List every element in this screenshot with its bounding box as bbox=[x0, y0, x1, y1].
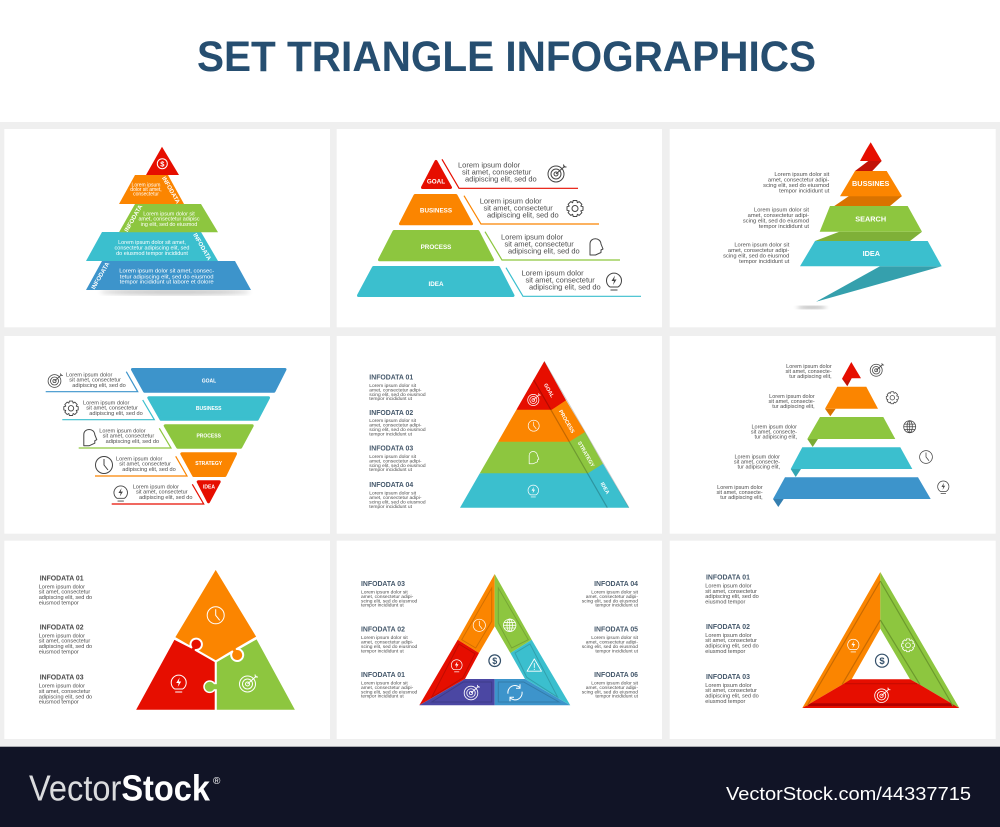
outer edge bbox=[544, 361, 629, 508]
teal line bbox=[62, 400, 154, 420]
green line bbox=[79, 428, 171, 448]
red bottom band bbox=[807, 703, 955, 706]
infodata 03: INFODATA 03 bbox=[361, 581, 405, 588]
idea text: adipiscing elit, sed do bbox=[529, 282, 601, 292]
icon: gear bbox=[886, 392, 898, 404]
text block 1: scing elit, sed do eiusmod bbox=[763, 183, 829, 189]
text 1: tur adipiscing elit, bbox=[789, 374, 832, 380]
text block 3: amet, consectetur adipi- bbox=[728, 248, 789, 254]
green knob bbox=[204, 681, 215, 692]
inset outlines bbox=[432, 588, 559, 702]
teal layer bbox=[791, 447, 912, 469]
panel 4: inverted pyramid bbox=[4, 336, 330, 534]
icon: bulb bbox=[171, 675, 186, 692]
infodata 05: scing elit, sed do eiusmod bbox=[582, 644, 638, 650]
orange line bbox=[464, 196, 599, 224]
text 3: Lorem ipsum dolor bbox=[751, 424, 797, 430]
text block 2: tempor incididunt ut bbox=[759, 224, 809, 230]
infodata 04: INFODATA 04 bbox=[369, 482, 413, 489]
strategy layer bbox=[182, 454, 236, 476]
icon: bulb bbox=[451, 660, 462, 672]
icon: head bbox=[590, 239, 603, 255]
infodata 01: INFODATA 01 bbox=[369, 374, 413, 382]
icon: target bbox=[528, 393, 541, 406]
infodata 03: sit amet, consectetur bbox=[39, 689, 90, 695]
icon: target bbox=[240, 674, 258, 692]
text 2: sit amet, consectetur bbox=[86, 406, 138, 412]
green fold bbox=[815, 232, 922, 241]
business layer bbox=[400, 196, 472, 224]
infodata 02: adipiscing elit, sed do bbox=[39, 644, 92, 650]
footer logo: VectorStock bbox=[29, 768, 211, 809]
layer labels bbox=[852, 179, 889, 258]
infodata 01: amet, consectetur adipi- bbox=[361, 685, 414, 691]
text 4: tur adipiscing elit, bbox=[738, 465, 780, 471]
infodata 02: eiusmod tempor bbox=[705, 649, 746, 655]
red segment bbox=[419, 640, 479, 705]
infodata 04: amet, consectetur adipi- bbox=[369, 495, 422, 501]
infodata 01: Lorem ipsum dolor bbox=[705, 584, 752, 590]
teal text: do eiusmod tempor incididunt bbox=[116, 251, 188, 257]
orange fold bbox=[825, 409, 836, 416]
blue text: tempor incididunt ut labore et dolore bbox=[120, 280, 214, 286]
infodata 01: amet, consectetur adipi- bbox=[369, 387, 422, 393]
teal tail bbox=[816, 266, 942, 302]
red band bbox=[516, 361, 566, 410]
fold labels: PROCESS bbox=[557, 409, 575, 435]
infodata 04: scing elit, sed do eiusmod bbox=[582, 598, 638, 604]
infodata 02: sit amet, consectetur bbox=[39, 639, 90, 645]
red side bbox=[802, 679, 959, 708]
orange segment bbox=[458, 574, 495, 653]
shadow under pyramid bbox=[100, 289, 250, 295]
layer labels bbox=[420, 178, 452, 288]
panel 6: stepped ribbon pyramid bbox=[670, 336, 996, 534]
infodata 02: amet, consectetur adipi- bbox=[361, 640, 414, 646]
layer labels: BUSINESS bbox=[196, 406, 222, 412]
infodata 01: Lorem ipsum dolor sit bbox=[369, 383, 417, 389]
infodata 02: tempor incididunt ut bbox=[361, 648, 404, 654]
text 3: sit amet, consectetur bbox=[103, 434, 154, 440]
icon: clock bbox=[207, 607, 224, 624]
orange fold bbox=[834, 196, 902, 206]
infodata 02: Lorem ipsum dolor bbox=[705, 633, 752, 639]
icon: bulb bbox=[528, 485, 539, 497]
fold labels bbox=[542, 383, 610, 496]
teal layer bbox=[86, 232, 218, 261]
infodata 03: scing elit, sed do eiusmod bbox=[361, 598, 418, 604]
orange tab label: INFODATA bbox=[160, 176, 181, 206]
green puzzle piece bbox=[216, 638, 296, 711]
text 1: Lorem ipsum dolor bbox=[786, 364, 832, 370]
panel 3: zigzag pyramid bbox=[670, 129, 996, 327]
footer bar bbox=[0, 747, 1000, 827]
infodata 02: INFODATA 02 bbox=[40, 624, 84, 632]
panel 2: rounded pyramid with lines bbox=[337, 129, 662, 327]
infodata 03: amet, consectetur adipi- bbox=[361, 594, 414, 600]
infodata 06: INFODATA 06 bbox=[594, 672, 638, 679]
icon: globe bbox=[503, 619, 516, 632]
icon: target bbox=[875, 688, 890, 702]
green fold bbox=[807, 439, 818, 447]
orange text: consectetur bbox=[133, 192, 159, 198]
page background bbox=[0, 122, 1000, 747]
green text: ing elit, sed do eiusmod bbox=[141, 222, 197, 228]
text 4: adipiscing elit, sed do bbox=[122, 467, 176, 473]
orange text: Lorem ipsum bbox=[132, 182, 160, 188]
text 2: Lorem ipsum dolor bbox=[769, 394, 815, 400]
icon: dollar bbox=[157, 159, 167, 169]
orange line bbox=[95, 456, 187, 476]
green text: amet, consectetur adipisc bbox=[138, 217, 200, 223]
process text: adipiscing elit, sed do bbox=[508, 246, 580, 256]
blue text: Lorem ipsum dolor sit amet, consec- bbox=[119, 269, 214, 275]
red puzzle piece with knob bbox=[134, 638, 216, 711]
process text: Lorem ipsum dolor bbox=[501, 232, 564, 242]
orange layer bbox=[840, 171, 902, 196]
infodata 03: adipiscing elit, sed do bbox=[39, 694, 92, 700]
green layer bbox=[820, 206, 922, 232]
panel 1: layered pyramid bbox=[4, 129, 330, 327]
infodata 03: eiusmod tempor bbox=[705, 699, 746, 705]
orange layer bbox=[119, 175, 184, 204]
fold line bbox=[534, 380, 607, 508]
infodata 04: amet, consectetur adipi- bbox=[586, 594, 638, 600]
infodata 01: tempor incididunt ut bbox=[361, 694, 404, 700]
infodata 03: Lorem ipsum dolor sit bbox=[361, 590, 408, 596]
layer labels: GOAL bbox=[427, 178, 445, 186]
goal text: sit amet, consectetur bbox=[462, 168, 532, 176]
infodata 01: adipiscing elit, sed do bbox=[39, 595, 92, 601]
infodata 01: scing elit, sed do eiusmod bbox=[361, 689, 418, 695]
text 4: sit amet, consecte- bbox=[734, 460, 780, 466]
green segment bbox=[495, 574, 532, 653]
infodata 05: amet, consectetur adipi- bbox=[586, 640, 638, 646]
infodata 03: Lorem ipsum dolor bbox=[39, 684, 85, 690]
infodata 01: scing elit, sed do eiusmod bbox=[369, 392, 426, 398]
infodata 02: adipiscing elit, sed do bbox=[705, 644, 759, 650]
infodata 06: Lorem ipsum dolor sit bbox=[591, 680, 639, 686]
infodata 05: Lorem ipsum dolor sit bbox=[591, 635, 639, 641]
infodata 05: tempor incididunt ut bbox=[595, 648, 639, 654]
text 3: Lorem ipsum dolor bbox=[99, 428, 146, 434]
red apex bbox=[146, 147, 179, 175]
red line bbox=[112, 484, 204, 504]
red arrow bbox=[842, 362, 861, 381]
text block 3: Lorem ipsum dolor sit bbox=[734, 243, 790, 249]
icon: target bbox=[548, 164, 566, 182]
infodata 01: eiusmod tempor bbox=[705, 600, 746, 606]
infodata 03: Lorem ipsum dolor sit bbox=[369, 454, 417, 460]
infodata 01: INFODATA 01 bbox=[40, 576, 84, 582]
blue layer bbox=[773, 477, 931, 499]
infodata 01: eiusmod tempor bbox=[39, 600, 79, 606]
layer labels: IDEA bbox=[203, 484, 215, 490]
orange layer bbox=[825, 387, 878, 409]
text 2: sit amet, consecte- bbox=[769, 399, 815, 405]
green side bbox=[880, 572, 959, 708]
process layer bbox=[165, 426, 252, 447]
goal text: Lorem ipsum dolor bbox=[458, 160, 521, 170]
orange band bbox=[498, 400, 585, 442]
blue layer bbox=[86, 261, 251, 290]
infodata 01: sit amet, consectetur bbox=[39, 590, 90, 596]
red arrow head bbox=[860, 142, 882, 161]
layer labels: IDEA bbox=[863, 249, 881, 258]
green line bbox=[485, 232, 620, 260]
icon: head bbox=[529, 452, 539, 464]
blue text: tetur adipiscing elit, sed do eiusmod bbox=[120, 274, 214, 280]
infodata 03: scing elit, sed do eiusmod bbox=[369, 463, 426, 469]
infodata 02: Lorem ipsum dolor sit bbox=[361, 635, 408, 641]
text block 2: scing elit, sed do eiusmod bbox=[743, 218, 809, 224]
green knob joint bbox=[212, 684, 218, 689]
layer labels: PROCESS bbox=[421, 244, 451, 251]
text block 1: tempor incididunt ut bbox=[779, 188, 830, 194]
text 4: Lorem ipsum dolor bbox=[734, 455, 780, 461]
teal layer bbox=[800, 241, 942, 266]
process text: sit amet, consectetur bbox=[504, 240, 574, 248]
text 5: tur adipiscing elit, bbox=[720, 495, 763, 501]
icon: target bbox=[48, 373, 63, 387]
idea text: sit amet, consectetur bbox=[526, 276, 595, 284]
business text: adipiscing elit, sed do bbox=[487, 210, 559, 220]
infodata 01: INFODATA 01 bbox=[361, 672, 405, 679]
blue segment bbox=[495, 679, 570, 705]
text 2: Lorem ipsum dolor bbox=[83, 400, 129, 406]
layer labels: STRATEGY bbox=[195, 461, 223, 467]
text 1: Lorem ipsum dolor bbox=[66, 372, 112, 378]
icon: dollar bbox=[876, 654, 888, 667]
infodata 03: amet, consectetur adipi- bbox=[369, 458, 422, 464]
teal line bbox=[506, 268, 641, 296]
infodata 03: tempor incididunt ut bbox=[369, 467, 413, 473]
text block 2: amet, consectetur adipi- bbox=[748, 213, 809, 219]
text 5: adipiscing elit, sed do bbox=[139, 495, 192, 501]
panel 7: puzzle triangle bbox=[4, 541, 330, 739]
teal tab label: INFODATA bbox=[191, 233, 212, 262]
infodata 03: sit amet, consectetur bbox=[705, 688, 757, 694]
ribbon ridges bbox=[807, 581, 953, 706]
business text: sit amet, consectetur bbox=[484, 204, 553, 212]
icon: dollar: $ bbox=[492, 656, 497, 666]
red ridge bbox=[845, 683, 917, 685]
green text: Lorem ipsum dolor sit bbox=[143, 211, 195, 217]
footer url: VectorStock.com/44337715 bbox=[726, 783, 971, 804]
idea layer bbox=[358, 268, 513, 296]
teal band bbox=[460, 464, 629, 508]
panel 5: folded triangle bbox=[337, 336, 662, 534]
text 5: Lorem ipsum dolor bbox=[133, 484, 179, 490]
green layer bbox=[119, 204, 218, 232]
icon: target bbox=[464, 685, 480, 700]
business text: Lorem ipsum dolor bbox=[480, 196, 542, 206]
icon: dollar: $ bbox=[160, 160, 165, 168]
infodata 03: INFODATA 03 bbox=[369, 446, 413, 452]
icon: head bbox=[84, 429, 97, 446]
icon: clock bbox=[528, 420, 539, 431]
fold labels: STRATEGY bbox=[576, 441, 595, 469]
infodata 01: sit amet, consectetur bbox=[705, 589, 757, 595]
infodata 04: scing elit, sed do eiusmod bbox=[369, 500, 426, 506]
infodata 03: eiusmod tempor bbox=[39, 700, 79, 706]
infodata 02: eiusmod tempor bbox=[39, 649, 79, 655]
icon: cycle bbox=[508, 684, 522, 701]
idea text: Lorem ipsum dolor bbox=[522, 268, 584, 278]
idea layer bbox=[198, 482, 219, 502]
infodata 02: scing elit, sed do eiusmod bbox=[361, 644, 418, 650]
orange side bbox=[802, 572, 880, 708]
infodata 02: amet, consectetur adipi- bbox=[369, 423, 422, 429]
fold labels: IDEA bbox=[599, 482, 610, 496]
infodata 02: INFODATA 02 bbox=[706, 624, 750, 631]
layer labels: SEARCH bbox=[855, 214, 886, 223]
icon: bulb bbox=[114, 486, 127, 501]
icon: warning bbox=[527, 659, 542, 671]
text 3: adipiscing elit, sed do bbox=[106, 439, 159, 445]
infodata 04: tempor incididunt ut bbox=[369, 504, 413, 510]
text 5: sit amet, consecte- bbox=[717, 490, 763, 496]
infodata 03: INFODATA 03 bbox=[40, 674, 84, 682]
orange text: dolor sit amet, bbox=[130, 187, 162, 193]
text 4: sit amet, consectetur bbox=[119, 462, 171, 468]
infodata 02: INFODATA 02 bbox=[361, 626, 405, 634]
text block 1: Lorem ipsum dolor sit bbox=[774, 172, 830, 178]
text 2: tur adipiscing elit, bbox=[772, 404, 815, 410]
goal text: adipiscing elit, sed do bbox=[465, 174, 537, 184]
infodata 03: tempor incididunt ut bbox=[361, 603, 404, 609]
panel 8: six segment triangle bbox=[337, 541, 662, 739]
infodata 02: scing elit, sed do eiusmod bbox=[369, 427, 426, 433]
text block 1: amet, consectetur adipi- bbox=[768, 177, 829, 183]
infodata 05: INFODATA 05 bbox=[594, 626, 638, 634]
infodata 01: adipiscing elit, sed do bbox=[705, 594, 759, 600]
infodata 06: scing elit, sed do eiusmod bbox=[582, 689, 638, 695]
layer labels: IDEA bbox=[428, 281, 444, 288]
infodata 02: sit amet, consectetur bbox=[705, 638, 757, 644]
icon: gear bbox=[567, 200, 583, 216]
icon: clock bbox=[920, 451, 932, 463]
shadow bbox=[797, 306, 827, 309]
infodata 03: INFODATA 03 bbox=[706, 674, 750, 681]
layer labels: BUSSINES bbox=[852, 179, 889, 188]
red line bbox=[442, 159, 578, 188]
teal segment bbox=[510, 640, 570, 705]
infodata 01: INFODATA 01 bbox=[706, 574, 750, 582]
text 1: sit amet, consecte- bbox=[786, 369, 832, 375]
icon: globe bbox=[904, 421, 916, 433]
text block 2: Lorem ipsum dolor sit bbox=[754, 208, 809, 214]
blue fold bbox=[773, 499, 784, 507]
registered mark: ® bbox=[213, 776, 221, 787]
goal layer bbox=[132, 370, 285, 391]
infodata 02: Lorem ipsum dolor sit bbox=[369, 418, 417, 424]
icon: gear bbox=[64, 401, 78, 416]
business layer bbox=[149, 398, 268, 419]
layer labels: PROCESS bbox=[196, 434, 222, 440]
text 1: sit amet, consectetur bbox=[69, 378, 121, 384]
layer labels: GOAL bbox=[202, 378, 216, 384]
text block 3: scing elit, sed do eiusmod bbox=[723, 254, 789, 260]
layer labels: BUSINESS bbox=[420, 208, 452, 215]
goal layer bbox=[422, 162, 450, 188]
infodata 02: Lorem ipsum dolor bbox=[39, 633, 85, 639]
teal text: Lorem ipsum dolor sit amet, bbox=[118, 240, 186, 246]
fold labels: GOAL bbox=[542, 383, 555, 400]
icon: bulb bbox=[938, 481, 949, 494]
indigo segment bbox=[419, 679, 495, 705]
red arrow fold bbox=[855, 161, 882, 171]
panel 9: ribbon triangle bbox=[670, 541, 996, 739]
infodata 01: Lorem ipsum dolor sit bbox=[361, 680, 408, 686]
text 2: adipiscing elit, sed do bbox=[89, 411, 143, 417]
green tab label: INFODATA bbox=[124, 204, 145, 233]
infodata 03: Lorem ipsum dolor bbox=[705, 683, 752, 689]
text 4: Lorem ipsum dolor bbox=[116, 456, 162, 462]
infodata 06: tempor incididunt ut bbox=[595, 694, 639, 700]
red fold bbox=[842, 378, 852, 386]
infodata 06: amet, consectetur adipi- bbox=[586, 685, 638, 691]
icon: gear bbox=[902, 639, 914, 652]
icon: clock bbox=[96, 456, 112, 474]
icon: bulb bbox=[606, 273, 622, 290]
process layer bbox=[380, 232, 492, 260]
layer labels bbox=[195, 378, 223, 490]
orange puzzle piece with knob bbox=[174, 568, 258, 662]
infodata 02: INFODATA 02 bbox=[369, 410, 413, 417]
text 1: adipiscing elit, sed do bbox=[72, 383, 126, 389]
infodata 04: tempor incididunt ut bbox=[595, 603, 639, 609]
blue tab label: INFODATA bbox=[91, 261, 112, 291]
green layer bbox=[807, 417, 895, 439]
title: SET TRIANGLE INFOGRAPHICS bbox=[197, 33, 816, 81]
teal fold bbox=[791, 469, 801, 477]
text 5: Lorem ipsum dolor bbox=[717, 485, 763, 491]
icon: clock bbox=[473, 619, 485, 631]
text 3: sit amet, consecte- bbox=[751, 429, 797, 435]
green band bbox=[480, 432, 603, 473]
teal text: consectetur adipiscing elit, sed bbox=[115, 246, 189, 252]
infodata 01: tempor incididunt ut bbox=[369, 396, 413, 402]
icon: bulb bbox=[848, 639, 859, 652]
infodata 04: Lorem ipsum dolor sit bbox=[591, 590, 639, 596]
icon: dollar bbox=[489, 655, 501, 666]
blue line bbox=[46, 372, 138, 392]
infodata 04: Lorem ipsum dolor sit bbox=[369, 490, 417, 496]
icon: dollar: $ bbox=[879, 656, 885, 667]
infodata 02: tempor incididunt ut bbox=[369, 432, 413, 438]
text 3: tur adipiscing elit, bbox=[754, 434, 797, 440]
icon: target bbox=[870, 363, 884, 376]
infodata 03: adipiscing elit, sed do bbox=[705, 694, 759, 700]
text block 3: tempor incididunt ut bbox=[739, 259, 790, 265]
text 5: sit amet, consectetur bbox=[136, 490, 188, 496]
infodata 01: Lorem ipsum dolor bbox=[39, 584, 85, 590]
infodata 04: INFODATA 04 bbox=[594, 581, 638, 588]
